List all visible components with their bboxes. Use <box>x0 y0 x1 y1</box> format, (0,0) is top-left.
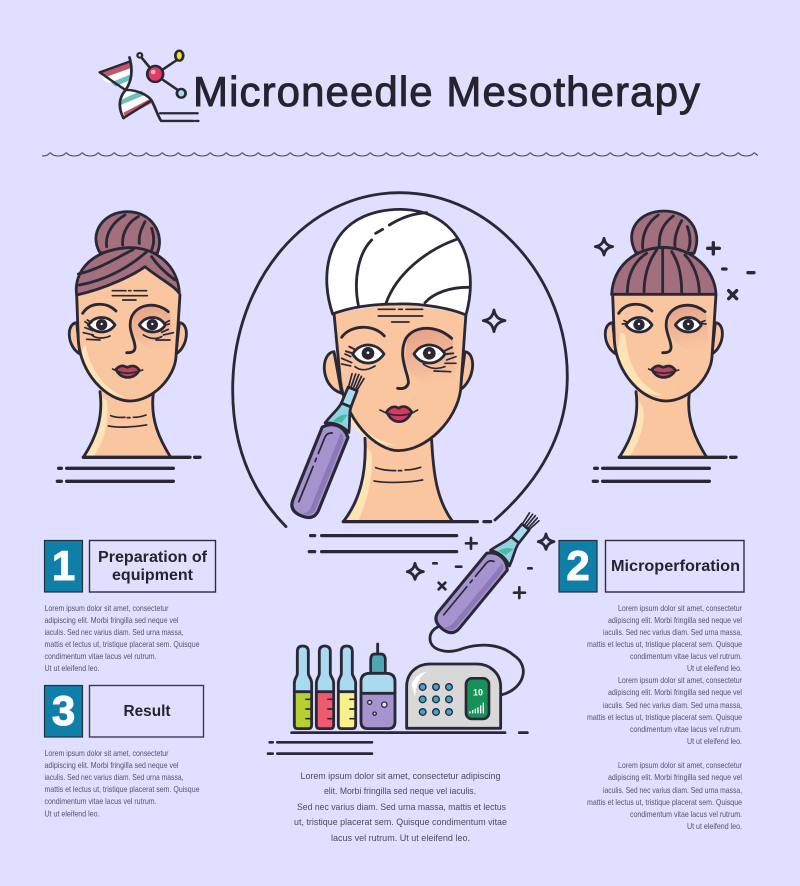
caption lines <box>593 468 709 481</box>
step 3 text: condimentum vitae lacus vel rutrum. <box>44 796 156 806</box>
step 2 badge <box>559 540 597 592</box>
step 2 text: iaculis. Sed nec varius diam. Sed urna massa, <box>603 700 742 710</box>
central text <box>294 771 507 844</box>
title icon: DNA and molecule <box>100 51 198 121</box>
step 1 text: mattis et lectus ut, tristique placerat sem. Quisque <box>44 639 200 649</box>
central text: Lorem ipsum dolor sit amet, consectetur adipiscing <box>300 771 500 782</box>
illustration: face after treatment <box>593 211 754 481</box>
brows and nose <box>83 304 168 353</box>
eyes <box>88 317 115 332</box>
ears <box>324 352 342 393</box>
title: Microneedle Mesotherapy <box>193 68 700 115</box>
lips <box>387 407 412 422</box>
neck <box>343 437 453 522</box>
caption lines <box>268 742 372 754</box>
control device: 10 <box>473 688 483 698</box>
neck <box>619 390 707 457</box>
caption lines <box>309 536 457 552</box>
step 1 text: condimentum vitae lacus vel rutrum. <box>44 651 156 661</box>
decorative marks <box>708 243 754 299</box>
eyes <box>353 345 384 363</box>
serum bottle <box>361 644 395 729</box>
step 2 text: Ut ut eleifend leo. <box>687 663 742 673</box>
illustration: face before treatment <box>57 212 200 481</box>
step 3 text: mattis et lectus ut, tristique placerat sem. Quisque <box>44 784 200 794</box>
lips <box>116 366 139 377</box>
neck <box>83 390 171 457</box>
central text: lacus vel rutrum. Ut ut eleifend leo. <box>331 833 470 844</box>
brows and nose <box>619 304 705 353</box>
step 2 text: mattis et lectus ut, tristique placerat sem. Quisque <box>587 712 742 722</box>
pen <box>432 507 545 637</box>
central text: elit. Morbi fringilla sed neque vel iaculis. <box>324 786 476 797</box>
vial yellow-green <box>294 646 312 729</box>
step 2 heading: Microperforation <box>611 558 740 575</box>
face shape <box>77 267 180 401</box>
vial yellow <box>338 646 356 729</box>
shelf line <box>292 728 527 737</box>
lips <box>652 366 675 377</box>
lashes and wrinkles <box>346 347 453 354</box>
step 2 text: iaculis. Sed nec varius diam. Sed urna massa, <box>603 785 742 795</box>
forehead and neck lines <box>108 291 147 427</box>
bun <box>632 211 697 253</box>
control device <box>407 664 501 728</box>
central text: Sed nec varius diam. Sed urna massa, mattis et lectus <box>297 802 506 813</box>
step 1 text: adipiscing elit. Morbi fringilla sed neque vel <box>44 615 179 625</box>
step 2 text: condimentum vitae lacus vel rutrum. <box>630 651 742 661</box>
ears <box>69 323 80 354</box>
bun <box>96 212 159 253</box>
step 3 text: Lorem ipsum dolor sit amet, consectetur <box>44 748 169 758</box>
step 2 text <box>587 603 742 831</box>
step 2 text: Lorem ipsum dolor sit amet, consectetur <box>618 603 742 613</box>
step 1 badge: 1 <box>52 542 75 589</box>
step 2 text: mattis et lectus ut, tristique placerat sem. Quisque <box>587 797 742 807</box>
illustration: central face with microneedle pen <box>233 193 567 552</box>
ears <box>605 323 616 354</box>
base line <box>83 452 200 462</box>
lashes and wrinkles <box>83 320 173 340</box>
sparkles and marks <box>407 534 554 598</box>
hair <box>76 248 179 295</box>
step 2 text: condimentum vitae lacus vel rutrum. <box>630 809 742 819</box>
central text: ut, tristique placerat sem. Quisque condimentum vitae <box>294 817 507 828</box>
step 2 text: mattis et lectus ut, tristique placerat sem. Quisque <box>587 639 742 649</box>
step 2 text: Ut ut eleifend leo. <box>687 821 742 831</box>
step 3 badge: 3 <box>52 687 75 734</box>
lashes <box>622 321 706 324</box>
step 3 text: adipiscing elit. Morbi fringilla sed neque vel <box>44 760 179 770</box>
base line <box>343 517 491 527</box>
step 2 text: adipiscing elit. Morbi fringilla sed neque vel <box>608 772 742 782</box>
step 2 heading <box>606 540 744 592</box>
step 1 heading <box>90 540 216 592</box>
pen on face <box>289 369 371 521</box>
eyes <box>626 317 652 332</box>
turban <box>327 209 470 315</box>
step 3 text <box>44 748 200 818</box>
step 3 heading: Result <box>124 703 171 720</box>
sparkle <box>595 238 613 255</box>
step 1 heading: equipment <box>112 567 194 584</box>
face shape <box>613 295 716 401</box>
step 1 heading: Preparation of <box>98 549 208 566</box>
step 2 text: adipiscing elit. Morbi fringilla sed neque vel <box>608 615 742 625</box>
step 1 text: Lorem ipsum dolor sit amet, consectetur <box>44 603 169 613</box>
illustration: equipment <box>268 507 554 754</box>
step 1 badge <box>44 540 82 592</box>
step 2 text: Ut ut eleifend leo. <box>687 736 742 746</box>
step 3 text: Ut ut eleifend leo. <box>44 808 100 818</box>
step 3 text: iaculis. Sed nec varius diam. Sed urna massa, <box>44 772 184 782</box>
step 2 text: iaculis. Sed nec varius diam. Sed urna massa, <box>603 627 742 637</box>
step 1 text <box>44 603 200 673</box>
step 3 heading <box>90 686 204 737</box>
step 1 text: Ut ut eleifend leo. <box>44 663 100 673</box>
base line <box>619 452 736 462</box>
cable <box>430 627 523 695</box>
step 2 text: adipiscing elit. Morbi fringilla sed neque vel <box>608 687 742 697</box>
sparkle <box>483 310 505 332</box>
step 2 badge: 2 <box>566 542 590 589</box>
step 2 text: Lorem ipsum dolor sit amet, consectetur <box>618 675 742 685</box>
forehead and neck lines <box>374 309 423 482</box>
circle frame <box>233 193 567 527</box>
face shape <box>334 303 466 451</box>
step 2 text: Lorem ipsum dolor sit amet, consectetur <box>618 760 742 770</box>
caption lines <box>57 468 173 481</box>
step 2 text: condimentum vitae lacus vel rutrum. <box>630 724 742 734</box>
step 1 text: iaculis. Sed nec varius diam. Sed urna massa, <box>44 627 184 637</box>
vial red <box>316 646 334 729</box>
step 3 badge <box>44 686 82 737</box>
hair with fringe <box>612 247 716 294</box>
brows and nose <box>342 327 452 389</box>
